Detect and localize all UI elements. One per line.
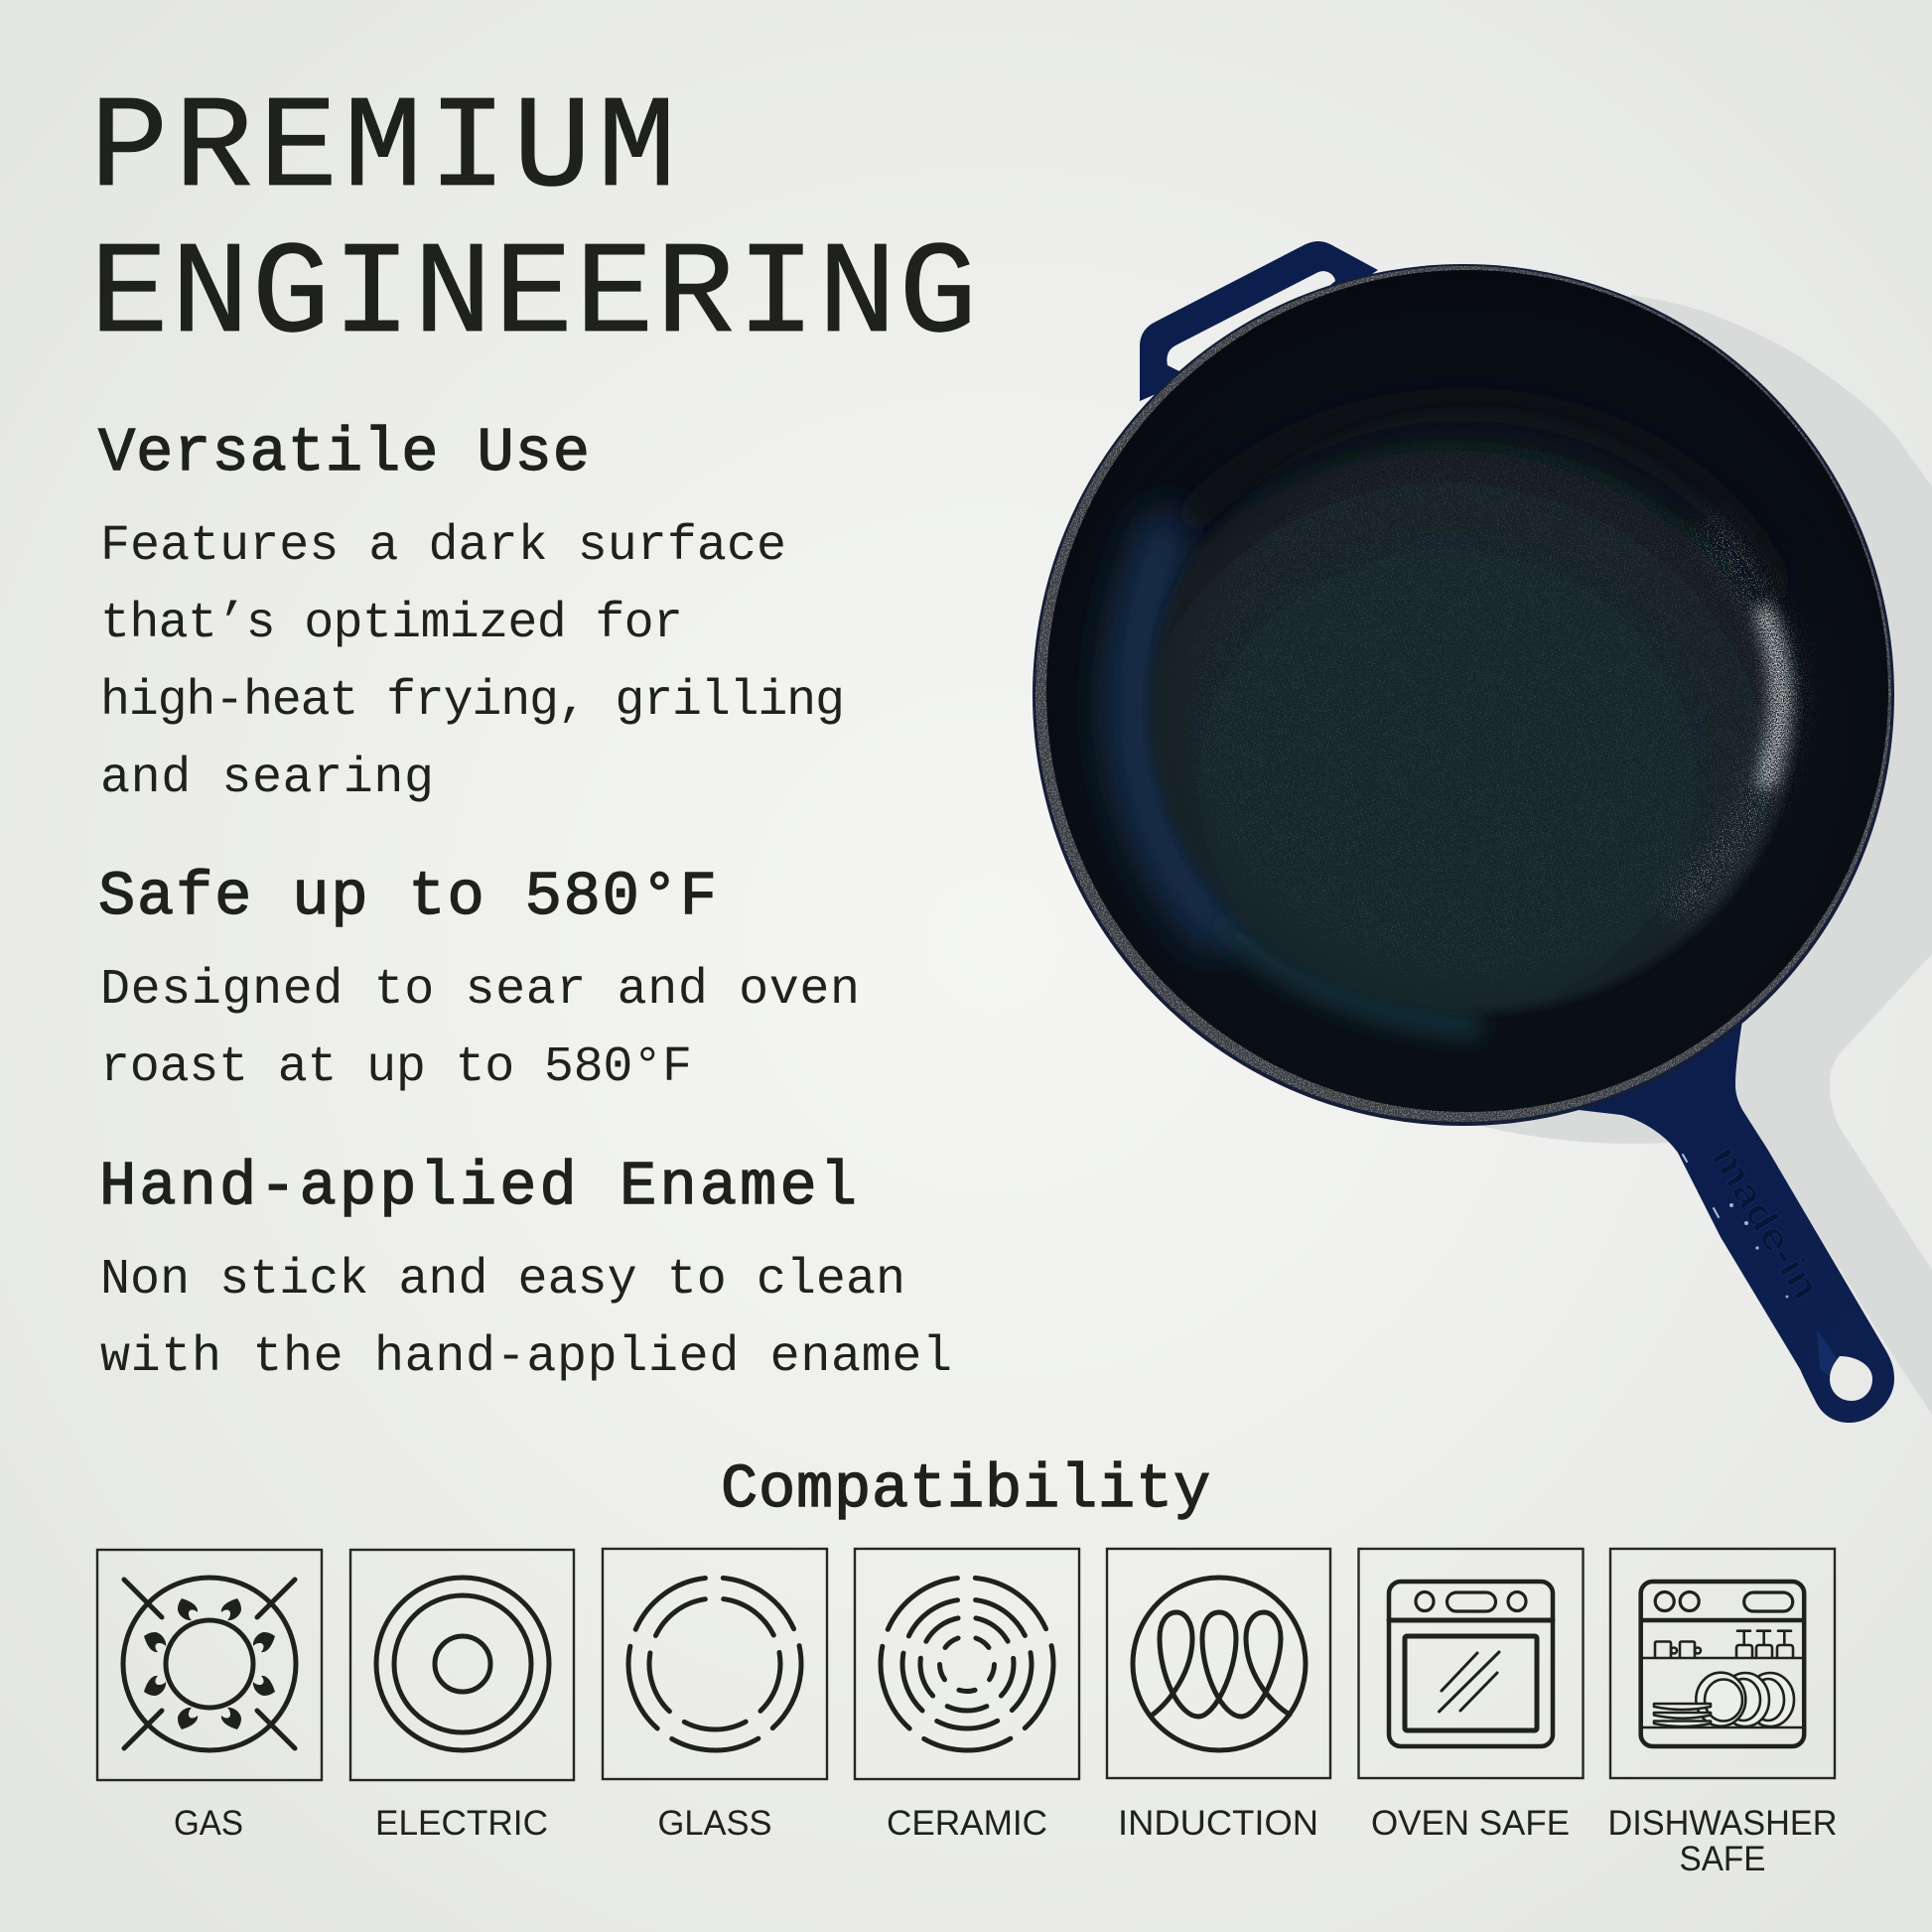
oven box: [1358, 1549, 1583, 1778]
section: versatile use: and searing: [100, 751, 434, 807]
specular highlight: [1683, 531, 1784, 903]
section: safe up to 580F: [98, 862, 860, 1096]
outer edge: [1033, 264, 1894, 1126]
compatibility heading: Compatibility: [721, 1454, 1211, 1525]
section: versatile use: Features a dark surface: [100, 518, 786, 575]
compatibility: dishwasher safe: [1608, 1549, 1837, 1878]
section: safe up to 580F: roast at up to 580°F: [100, 1039, 692, 1096]
electric box: [350, 1550, 574, 1780]
section: safe up to 580F: Safe up to 580°F: [98, 862, 717, 932]
induction box: [1107, 1549, 1330, 1778]
rim: [1035, 266, 1891, 1122]
icon: ceramic cooktop: [873, 1570, 1061, 1758]
compatibility: induction: [1107, 1549, 1330, 1843]
left helper handle: [1140, 241, 1378, 401]
section: versatile use: high-heat frying, grilling: [100, 673, 845, 730]
icon: glass cooktop: [621, 1570, 809, 1758]
section: hand-applied enamel: [99, 1152, 952, 1386]
gas label: GAS: [174, 1804, 243, 1843]
pan shadow: [1459, 295, 1932, 1415]
glass label: GLASS: [657, 1804, 772, 1843]
bright core of highlight: [1765, 616, 1780, 779]
glass box: [603, 1549, 827, 1779]
icon: oven: [1389, 1582, 1553, 1746]
handle glints: [1683, 1155, 1788, 1298]
title: ENGINEERING: [89, 221, 980, 370]
interior wall: [1046, 270, 1888, 1112]
dishwasher label second line: SAFE: [1680, 1840, 1765, 1878]
section: hand-applied enamel: Non stick and easy to clean: [100, 1252, 905, 1309]
section: versatile use: Versatile Use: [98, 418, 590, 488]
icon: induction coil: [1133, 1578, 1306, 1750]
icon: gas burner: [123, 1578, 296, 1750]
gas box: [97, 1550, 322, 1780]
dishwasher box: [1610, 1549, 1835, 1778]
floor sparkle dots: [1185, 443, 1761, 979]
compatibility: glass: [603, 1549, 827, 1843]
long handle: [1579, 1021, 1894, 1423]
section: versatile use: that’s optimized for: [100, 596, 683, 652]
electric label: ELECTRIC: [375, 1804, 548, 1843]
handle hole edge shading: [1817, 1329, 1837, 1376]
icon: electric coil: [376, 1578, 549, 1750]
upper floor fade: [1191, 405, 1777, 586]
compatibility: ceramic: [855, 1549, 1079, 1843]
blue wall band: [1133, 536, 1216, 923]
title: [89, 75, 980, 370]
icon: dishwasher: [1641, 1582, 1804, 1746]
skillet pan: [1033, 241, 1894, 1423]
ceramic box: [855, 1549, 1079, 1779]
oven label: OVEN SAFE: [1371, 1804, 1570, 1843]
section: hand-applied enamel: Hand-applied Enamel: [99, 1152, 857, 1222]
section: hand-applied enamel: with the hand-applied enamel: [100, 1329, 952, 1386]
embossed brand text: made-in: [1703, 1139, 1827, 1307]
compatibility: gas: [97, 1550, 322, 1843]
ceramic label: CERAMIC: [887, 1804, 1047, 1843]
section: versatile use: [98, 418, 845, 807]
section: safe up to 580F: Designed to sear and oven: [100, 962, 860, 1019]
teal reflection lower left: [1231, 928, 1469, 1025]
compatibility: oven safe: [1358, 1549, 1583, 1843]
dishwasher label: DISHWASHER: [1608, 1804, 1837, 1843]
compatibility: electric: [350, 1550, 574, 1843]
cooking floor: [1150, 409, 1797, 1013]
induction label: INDUCTION: [1118, 1804, 1318, 1843]
title: PREMIUM: [89, 75, 682, 224]
